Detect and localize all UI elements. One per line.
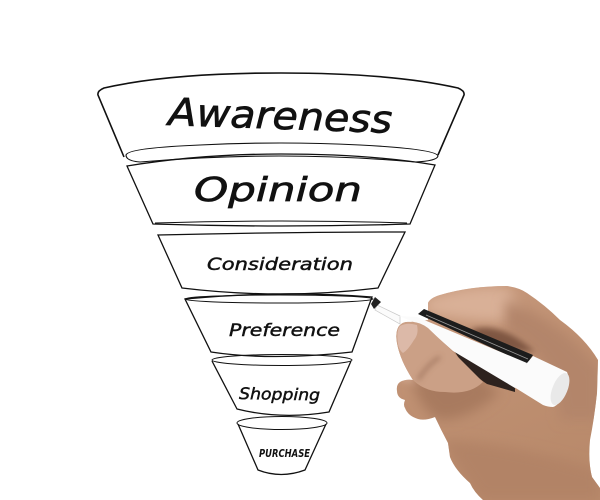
funnel tier: Shopping <box>212 354 352 415</box>
thumb <box>396 322 483 393</box>
label: Shopping: Shopping <box>239 384 320 404</box>
label: Awareness: Awareness <box>164 90 393 142</box>
marker stripe <box>426 315 528 359</box>
marker cap end <box>547 370 573 408</box>
funnel tier: Awareness <box>98 73 464 162</box>
funnel tier: Preference <box>185 294 373 356</box>
label: Opinion: Opinion <box>194 170 362 209</box>
marker cap <box>514 356 568 407</box>
thumbnail <box>397 324 418 353</box>
shadow under marker <box>455 352 515 392</box>
label: Consideration: Consideration <box>207 255 353 275</box>
label: Purchase: PURCHASE <box>259 447 310 460</box>
funnel infographic <box>97 72 600 500</box>
funnel tier: Purchase <box>237 416 327 474</box>
icon: hand holding marker <box>371 280 600 500</box>
funnel tier: Consideration <box>158 232 405 294</box>
label: Preference: Preference <box>229 321 340 341</box>
marker dark barrel <box>418 309 533 364</box>
hand silhouette with shading <box>390 280 600 500</box>
marker tip <box>375 305 400 324</box>
knuckle crease <box>418 357 440 380</box>
marker white barrel <box>399 316 527 388</box>
funnel tier: Opinion <box>127 154 435 226</box>
marker nib <box>371 297 381 309</box>
